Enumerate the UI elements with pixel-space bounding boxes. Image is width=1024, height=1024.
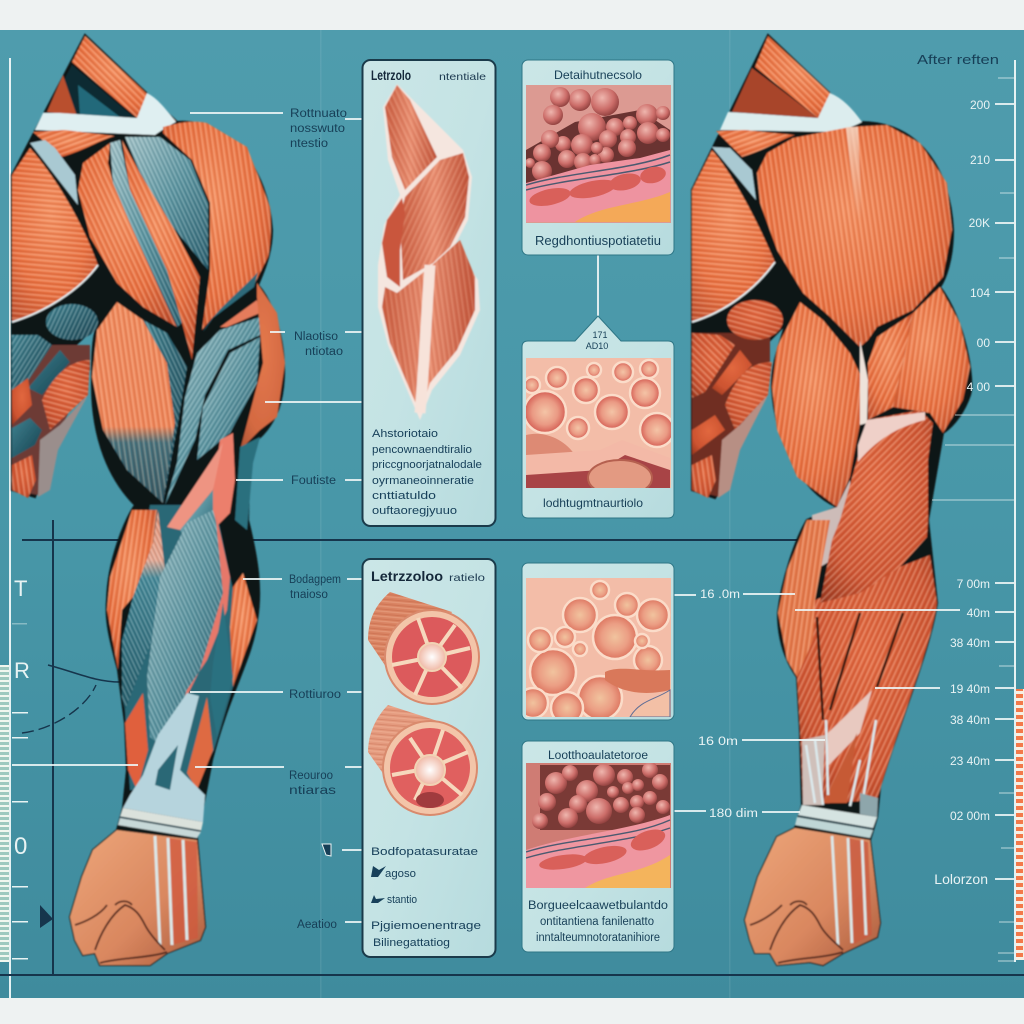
lower red muscles	[692, 300, 783, 498]
muscle cross-section two	[368, 705, 477, 815]
scale labels: 38 40m	[950, 713, 990, 727]
panel title: Letrzolo	[371, 68, 411, 83]
tissue image: nodules	[526, 85, 671, 223]
forearm big teal muscle	[147, 510, 223, 743]
panel body text: Pjgiemoenentrage	[371, 920, 481, 932]
big deltoid muscle	[757, 125, 952, 347]
left arm callout labels: ntiaras	[289, 785, 336, 797]
left axis and ruler: T	[14, 576, 27, 601]
tissue image: pale cells	[526, 578, 671, 717]
white tendon band	[35, 93, 176, 135]
outer arm inner lobe	[868, 313, 913, 420]
panel body text	[371, 846, 481, 949]
panel body text: ouftaoregjyuuo	[372, 505, 457, 517]
scale labels: 00	[977, 336, 990, 350]
small marker icon	[322, 844, 331, 856]
left arm callout labels: nosswuto	[290, 123, 345, 135]
tissue title: Detaihutnecsolo	[554, 68, 642, 82]
pale tendons below biceps	[812, 480, 855, 570]
shoulder top muscle	[755, 36, 860, 121]
thin dark teal strip	[235, 437, 260, 530]
panel subtitle: ntentiale	[439, 71, 486, 83]
panel: tissue detail cells	[518, 563, 674, 724]
right arm: post-treatment muscle anatomy	[692, 35, 971, 965]
diagonal forearm muscle	[820, 410, 933, 603]
left arm callout labels: ntiotao	[305, 346, 343, 358]
left arm callout labels: Foutiste	[291, 475, 336, 487]
right arm measurement labels: 16 0m	[698, 736, 738, 748]
right arm measurement labels: 180 dim	[709, 808, 758, 820]
scale labels: 7 00m	[957, 577, 990, 591]
panel body text: Ahstoriotaio	[372, 428, 438, 440]
panel body text: agoso	[385, 868, 416, 880]
minor ticks	[932, 78, 1014, 961]
scale labels: Lolorzon	[934, 871, 988, 887]
chest muscle	[12, 148, 98, 322]
panel body text: priccgnoorjatnalodale	[372, 459, 482, 471]
panel title: Letrzzoloo	[371, 569, 443, 584]
panel body text: Bodfopatasuratae	[371, 846, 478, 858]
forearm inner strip	[122, 510, 165, 710]
tissue caption: ontitantiena fanilenatto	[540, 916, 654, 928]
tissue caption: inntalteumnotoratanihiore	[536, 932, 660, 944]
dark axis lines	[0, 520, 1024, 975]
deltoid middle head	[122, 140, 200, 360]
panel subtitle: ratielo	[449, 572, 485, 584]
fist	[70, 830, 205, 965]
panel body text: stantio	[387, 894, 417, 906]
forearm right muscles	[125, 573, 257, 790]
fist	[745, 828, 880, 965]
deltoid right head	[163, 122, 271, 332]
left arm callout labels: Reouroo	[289, 770, 333, 782]
left arm callout labels: Bodagpem	[289, 574, 341, 586]
biceps muscle	[772, 302, 863, 507]
wrist band	[118, 808, 203, 838]
upper forearm teal muscles	[165, 300, 260, 505]
forearm outer left muscle	[107, 510, 157, 670]
panel body text: Bilinegattatiog	[373, 937, 450, 949]
panel: tissue detail with pointer: AD10	[586, 341, 608, 351]
pointer label: 171	[592, 330, 608, 340]
left arm callout labels: Aeatioo	[297, 919, 337, 931]
left axis and ruler	[0, 58, 30, 998]
shoulder dark triangle	[47, 65, 135, 118]
left arm: untreated muscle anatomy	[12, 35, 285, 965]
right scale with ticks and labels	[932, 60, 1024, 962]
tissue image: nodules	[526, 763, 671, 888]
wrist tendons	[123, 693, 205, 822]
major ticks	[995, 104, 1014, 879]
right arm measurement labels: 16 .0m	[700, 589, 740, 601]
wrist band	[795, 805, 877, 838]
isolated muscle illustration	[378, 84, 480, 420]
forearm lower mass	[797, 555, 937, 805]
scale labels: 104	[970, 286, 990, 300]
panel body text: pencownaendtiralio	[372, 444, 472, 456]
deltoid teal strip	[110, 140, 182, 327]
white tendon band	[720, 93, 862, 132]
check icon one	[371, 866, 386, 877]
left axis and ruler: 0	[14, 833, 27, 860]
shoulder top muscle	[72, 36, 176, 121]
panel: cross-section detail	[362, 559, 496, 957]
small upper chest muscle	[716, 130, 795, 157]
left arm callout labels: Nlaotiso	[294, 331, 338, 343]
tendon fan at wrist	[802, 690, 878, 817]
pink strips upper forearm	[167, 433, 235, 545]
white tendon strip	[860, 340, 868, 425]
scale labels	[934, 98, 990, 887]
left arm callout labels: Rottnuato	[290, 108, 347, 120]
scale labels: 4 00	[967, 380, 990, 394]
lower dark muscles	[12, 304, 98, 498]
right axis title: After reften	[917, 52, 999, 67]
left arm callout labels: Rottiuroo	[289, 689, 341, 701]
chest muscle	[692, 150, 775, 322]
outer arm outer lobe	[893, 287, 970, 433]
left arm callout labels: tnaioso	[290, 589, 328, 601]
panel: upper muscle detail	[362, 60, 496, 526]
tissue caption	[528, 900, 668, 944]
scale labels: 38 40m	[950, 636, 990, 650]
panel body text	[372, 428, 482, 517]
tissue title: Lootthoaulatetoroe	[548, 750, 648, 762]
scale labels: 210	[970, 153, 990, 167]
forearm outer left muscle	[778, 520, 830, 677]
scale labels: 200	[970, 98, 990, 112]
panel body text: oyrmaneoinneratie	[372, 475, 474, 487]
scale labels: 40m	[967, 606, 990, 620]
silhouette	[692, 35, 971, 965]
scale labels: 19 40m	[950, 682, 990, 696]
deltoid teal head	[125, 137, 208, 270]
scale labels: 20K	[969, 216, 990, 230]
small upper chest muscle	[33, 130, 115, 157]
tissue caption: Regdhontiuspotiatetiu	[535, 234, 661, 248]
deltoid left head	[78, 143, 177, 327]
outer red muscle	[240, 283, 285, 450]
left axis and ruler: R	[14, 658, 30, 683]
pale tendon wedge	[712, 147, 756, 200]
panel body text: cnttiatuldo	[372, 490, 436, 502]
right arm measurement labels	[698, 589, 758, 820]
panel: tissue detail top	[522, 60, 674, 255]
forearm underlay	[122, 505, 235, 790]
tissue caption: Borgueelcaawetbulantdo	[528, 900, 668, 912]
biceps muscle	[92, 302, 187, 503]
check icon two	[371, 895, 385, 903]
panel: tissue detail with pointer	[522, 316, 674, 518]
left arm callout labels	[289, 108, 347, 931]
left arm callout labels: ntestio	[290, 138, 328, 150]
tissue image: cells	[526, 358, 671, 488]
shoulder dark triangle	[732, 68, 818, 118]
pale tendon wedge	[30, 140, 78, 205]
panel: tissue detail nodules lower	[522, 741, 674, 952]
scale labels: 02 00m	[950, 809, 990, 823]
tissue caption: lodhtugmtnaurtiolo	[543, 496, 643, 510]
silhouette	[12, 35, 284, 965]
forearm pink diagonal	[180, 510, 230, 710]
muscle cross-section one	[368, 592, 479, 704]
leader lines	[12, 113, 960, 922]
scale labels: 23 40m	[950, 754, 990, 768]
